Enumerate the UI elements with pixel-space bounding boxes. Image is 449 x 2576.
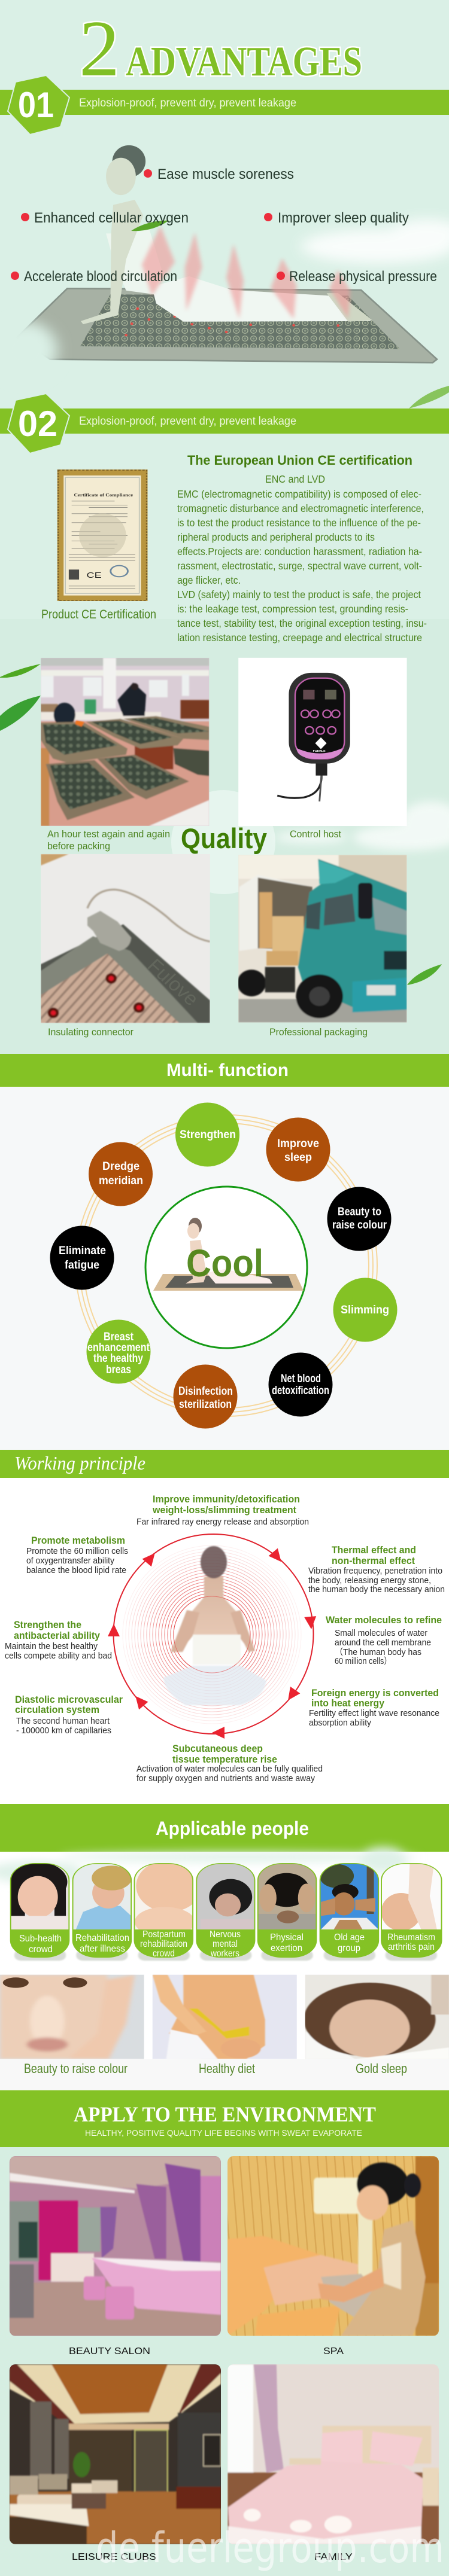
- caption: BEAUTY SALON: BEAUTY SALON: [69, 2346, 150, 2356]
- card shadows: [14, 1950, 437, 1961]
- principle: Promote metabolism: balance the blood lipid rate: [26, 1566, 126, 1575]
- card labels: Rheumatism: [387, 1932, 435, 1943]
- card labels: exertion: [271, 1943, 302, 1953]
- CE certification text: [177, 453, 427, 644]
- banner: Working principle: [0, 1450, 449, 1478]
- photo: professional packaging truck: [237, 855, 407, 1023]
- heading: Quality: Quality: [181, 822, 267, 854]
- function: Beauty to raise colour: [327, 1187, 392, 1251]
- photo: control host: [238, 658, 407, 826]
- woman seen from behind with belt: [163, 1546, 266, 1705]
- concentric energy rings: [123, 1545, 301, 1724]
- principle: Water molecules: （The human body has: [335, 1647, 421, 1657]
- function: Strengthen: Strengthen: [180, 1129, 236, 1141]
- banner 01: [0, 75, 449, 135]
- function: Disinfection sterilization: [174, 1365, 237, 1428]
- CE certification text: is to test the product resistance to the influence of the pe-: [177, 517, 421, 529]
- caption: hour test: An hour test again and again: [47, 829, 170, 840]
- caption: hour test: [47, 829, 170, 852]
- CE certification text: EMC (electromagnetic compatibility) is composed of elec-: [177, 488, 421, 500]
- banner: Apply to the environment: HEALTHY, POSITIVE QUALITY LIFE BEGINS WITH SWEAT EVAPORATE: [85, 2128, 362, 2138]
- title: 2: [79, 4, 120, 93]
- principle: Thermal effect: the body, releasing energy stone,: [308, 1576, 431, 1586]
- principle: Strengthen antibacterial: Strengthen the: [14, 1619, 81, 1630]
- principle: Thermal effect: Vibration frequency, penetration into: [308, 1566, 442, 1576]
- benefit: Improver sleep quality: Improver sleep quality: [278, 210, 409, 226]
- principle: Subcutaneous: tissue temperature rise: [172, 1754, 277, 1765]
- red cycle ring with arrows: [108, 1534, 317, 1739]
- principle: Foreign energy: Foreign energy is converted: [311, 1687, 439, 1699]
- people cards: [10, 1860, 442, 1961]
- faint backdrop of people section: [0, 1847, 419, 1883]
- benefit: Ease muscle soreness: Ease muscle soreness: [157, 166, 294, 182]
- principle: Thermal effect: [308, 1544, 445, 1595]
- function: Breast enhancement: [86, 1319, 151, 1384]
- centre circle: Cool: Cool: [186, 1242, 263, 1285]
- principle: Improve immunity: [136, 1493, 309, 1527]
- photo: hour test on mats in factory: [41, 658, 209, 826]
- heat flames: [142, 225, 350, 319]
- photo: family bedroom: [227, 2364, 439, 2544]
- mat: [0, 288, 437, 379]
- photo: gold sleep: [304, 1975, 449, 2059]
- principle: Strengthen antibacterial: antibacterial ability: [14, 1630, 101, 1641]
- certificate: Certificate of Compliance: [74, 493, 133, 498]
- banner: Apply to the environment: [0, 2090, 449, 2147]
- principle: Foreign energy: [309, 1687, 439, 1728]
- function: Improve sleep: Improve: [277, 1138, 319, 1150]
- caption: FAMILY: FAMILY: [314, 2552, 353, 2562]
- card: nervous mental workers: [196, 1864, 254, 1958]
- photo: beauty salon: [10, 2156, 221, 2336]
- principle: Strengthen antibacterial: Maintain the best healthy: [5, 1642, 98, 1651]
- card labels: Physical: [270, 1932, 304, 1943]
- principle: Diastolic: Diastolic microvascular: [15, 1694, 123, 1705]
- banner: Multi-function: Multi- function: [166, 1060, 289, 1080]
- mini mat: [153, 1274, 304, 1291]
- function: Breast enhancement: Breast: [104, 1331, 134, 1343]
- banner: Applicable people: Applicable people: [156, 1818, 309, 1839]
- banner 01: 01: [18, 85, 54, 125]
- caption: Product CE Certification: Product CE Certification: [41, 608, 156, 621]
- function: Net blood detoxification: Net blood: [281, 1373, 321, 1385]
- principle: Strengthen antibacterial: cells compete ability and bad: [5, 1651, 112, 1661]
- orange ring behind functions: [75, 1115, 377, 1416]
- cloud: [301, 219, 449, 263]
- function: Improve sleep: sleep: [284, 1151, 312, 1164]
- banner 02: Explosion-proof, prevent dry, prevent leakage: [79, 415, 296, 428]
- CE certification text: tromagnetic disturbance and electromagnetic interference,: [177, 502, 424, 514]
- principle: Promote metabolism: [26, 1535, 128, 1575]
- function: Disinfection sterilization: sterilization: [179, 1398, 232, 1411]
- principle: Promote metabolism: Promote metabolism: [31, 1535, 125, 1546]
- caption: Gold sleep: Gold sleep: [356, 2061, 407, 2076]
- principle: Foreign energy: into heat energy: [311, 1697, 384, 1709]
- heading: The European Union CE certification: [187, 453, 412, 468]
- principle: Strengthen antibacterial: [5, 1619, 112, 1661]
- function: Breast enhancement: the healthy: [93, 1352, 143, 1365]
- principle: Improve immunity: Improve immunity/detoxification: [153, 1493, 300, 1505]
- function: Eliminate fatigue: Eliminate: [59, 1245, 106, 1257]
- CE certification text: ripheral products and peripheral products to its: [177, 531, 375, 543]
- card: rehabilitation after illness: [73, 1864, 132, 1958]
- function: Slimming: Slimming: [341, 1304, 389, 1316]
- card labels: Sub-health: [19, 1934, 62, 1944]
- decorative leaf above banner 02: [409, 386, 449, 408]
- CE certification text: rassment, electrostatic, surge, spectral wave current, volt-: [177, 560, 422, 572]
- principle: Foreign energy: absorption ability: [309, 1718, 372, 1728]
- caption: hour test: before packing: [47, 841, 110, 852]
- function: Dredge meridian: Dredge: [102, 1160, 139, 1173]
- principle: Improve immunity: Far infrared ray energy release and absorption: [136, 1517, 309, 1527]
- card labels: Nervous: [210, 1929, 241, 1940]
- principle: Thermal effect: non-thermal effect: [332, 1555, 415, 1566]
- centre circle: Cool: [145, 1187, 307, 1348]
- principle: Diastolic: [15, 1694, 123, 1736]
- photo: spa: [227, 2156, 439, 2336]
- illustration: woman on heated mat: [0, 145, 449, 379]
- principle: Promote metabolism: Promote the 60 million cells: [26, 1547, 128, 1556]
- banner: Apply to the environment: APPLY TO THE ENVIRONMENT: [74, 2102, 376, 2126]
- banner 02: 02: [18, 404, 57, 444]
- card labels: group: [338, 1943, 360, 1953]
- function: Eliminate fatigue: fatigue: [65, 1259, 99, 1272]
- CE certification text: effects.Projects are: conduction harassment, radiation ha-: [177, 545, 422, 557]
- banner: Working principle: Working principle: [14, 1452, 145, 1474]
- caption: Healthy diet: Healthy diet: [199, 2061, 255, 2076]
- subheading: ENC and LVD: [265, 473, 325, 485]
- function: Dredge meridian: meridian: [99, 1175, 143, 1187]
- principle: Promote metabolism: of oxygentransfer ability: [26, 1556, 115, 1566]
- card labels: mental: [213, 1939, 238, 1949]
- caption: SPA: SPA: [323, 2346, 344, 2356]
- certificate: [57, 470, 147, 601]
- function: Beauty to raise colour: Beauty to: [338, 1206, 381, 1218]
- principle: Water molecules: around the cell membrane: [335, 1638, 431, 1648]
- function: Disinfection sterilization: Disinfection: [178, 1385, 233, 1398]
- function: Slimming: [333, 1278, 398, 1342]
- decorative leaf: [407, 964, 442, 985]
- principle: Improve immunity: weight-loss/slimming treatment: [152, 1504, 296, 1516]
- benefit: Accelerate blood circulation: Accelerate blood circulation: [24, 269, 177, 285]
- card labels: arthritis pain: [388, 1942, 435, 1952]
- CE certification text: lation resistance testing, creepage and electrical structure: [177, 632, 422, 644]
- caption: Insulating connector: Insulating connector: [48, 1027, 134, 1038]
- mini woman: [186, 1218, 272, 1284]
- function: Strengthen: [175, 1103, 239, 1166]
- card: physical exertion: [258, 1864, 316, 1958]
- card labels: after illness: [80, 1944, 125, 1954]
- principle: Subcutaneous: for supply oxygen and nutrients and waste away: [136, 1774, 315, 1784]
- caption: Professional packaging: Professional packaging: [269, 1027, 368, 1038]
- principle: Water molecules: [326, 1614, 442, 1666]
- caption: Control host: Control host: [290, 829, 341, 840]
- banner: Multi-function: [0, 1054, 449, 1087]
- quality photo group backdrop: [0, 664, 449, 894]
- principle: Thermal effect: the human body the necessary anion: [308, 1585, 445, 1595]
- function: Improve sleep: [266, 1117, 330, 1182]
- photo: insulating connector: [41, 854, 210, 1023]
- benefit: Enhanced cellular oxygen: Enhanced cellular oxygen: [34, 210, 189, 226]
- principle: Water molecules: Small molecules of water: [335, 1629, 427, 1638]
- card labels: Rehabilitation: [75, 1933, 129, 1943]
- card: old age group: [320, 1864, 378, 1958]
- background: advantages section: [0, 0, 449, 619]
- function: Breast enhancement: breas: [106, 1364, 131, 1376]
- banner: Applicable people: [0, 1804, 449, 1852]
- photo: control host: FUERLE: [313, 749, 326, 753]
- CE certification text: tance test, stability test, the original exception testing, insu-: [177, 617, 427, 629]
- CE certification text: age flicker, etc.: [177, 574, 241, 586]
- card labels: [19, 1929, 435, 1959]
- banner 02: [0, 394, 449, 453]
- caption: LEISURE CLUBS: LEISURE CLUBS: [72, 2552, 156, 2562]
- principle: Diastolic: - 100000 km of capillaries: [16, 1726, 111, 1736]
- photo: leisure clubs: [10, 2364, 221, 2544]
- function: Eliminate fatigue: [50, 1226, 114, 1289]
- function: Net blood detoxification: [268, 1353, 333, 1416]
- woman: [81, 145, 372, 324]
- function: Dredge meridian: [89, 1142, 153, 1206]
- card outlines: [11, 1864, 442, 1958]
- CE certification text: LVD (safety) mainly to test the product is safe, the project: [177, 589, 421, 600]
- principle: Subcutaneous: Subcutaneous deep: [172, 1743, 263, 1754]
- principle: Water molecules: Water molecules to refine: [326, 1614, 442, 1626]
- principle: Diastolic: The second human heart: [16, 1717, 110, 1726]
- principle: Subcutaneous: Activation of water molecules can be fully qualified: [136, 1764, 323, 1774]
- card labels: crowd: [153, 1949, 175, 1959]
- principle: Diastolic: circulation system: [15, 1704, 99, 1715]
- photo: healthy diet: [153, 1975, 297, 2059]
- card: postpartum rehabilitation crowd: [135, 1864, 193, 1957]
- card labels: Old age: [334, 1932, 365, 1943]
- principle: Subcutaneous: [136, 1743, 323, 1784]
- card labels: Postpartum: [142, 1929, 186, 1940]
- function: Beauty to raise colour: raise colour: [332, 1219, 387, 1231]
- card labels: crowd: [29, 1944, 53, 1955]
- CE certification text: is: the leakage test, compression test, grounding resis-: [177, 603, 408, 615]
- photo: insulating connector: Fulove: [142, 955, 203, 1010]
- function: Net blood detoxification: detoxification: [272, 1385, 329, 1397]
- principle: Thermal effect: Thermal effect and: [332, 1544, 416, 1556]
- function: Breast enhancement: enhancement: [87, 1342, 150, 1354]
- principle: Water molecules: 60 million cells）: [335, 1656, 392, 1666]
- banner 01: Explosion-proof, prevent dry, prevent leakage: [79, 97, 296, 109]
- title: ADVANTAGES: [126, 39, 362, 85]
- card: rheumatism arthritis pain: [381, 1864, 442, 1958]
- card labels: workers: [210, 1949, 239, 1959]
- title: [79, 4, 362, 93]
- card: sub-health crowd: [10, 1862, 69, 1958]
- certificate: CE: [87, 571, 102, 580]
- small leaf: [131, 221, 169, 231]
- card labels: rehabilitation: [140, 1939, 187, 1949]
- photo: beauty face: [0, 1975, 144, 2059]
- caption: Beauty to raise colour: Beauty to raise colour: [24, 2061, 128, 2076]
- principle: Foreign energy: Fertility effect light wave resonance: [309, 1709, 439, 1718]
